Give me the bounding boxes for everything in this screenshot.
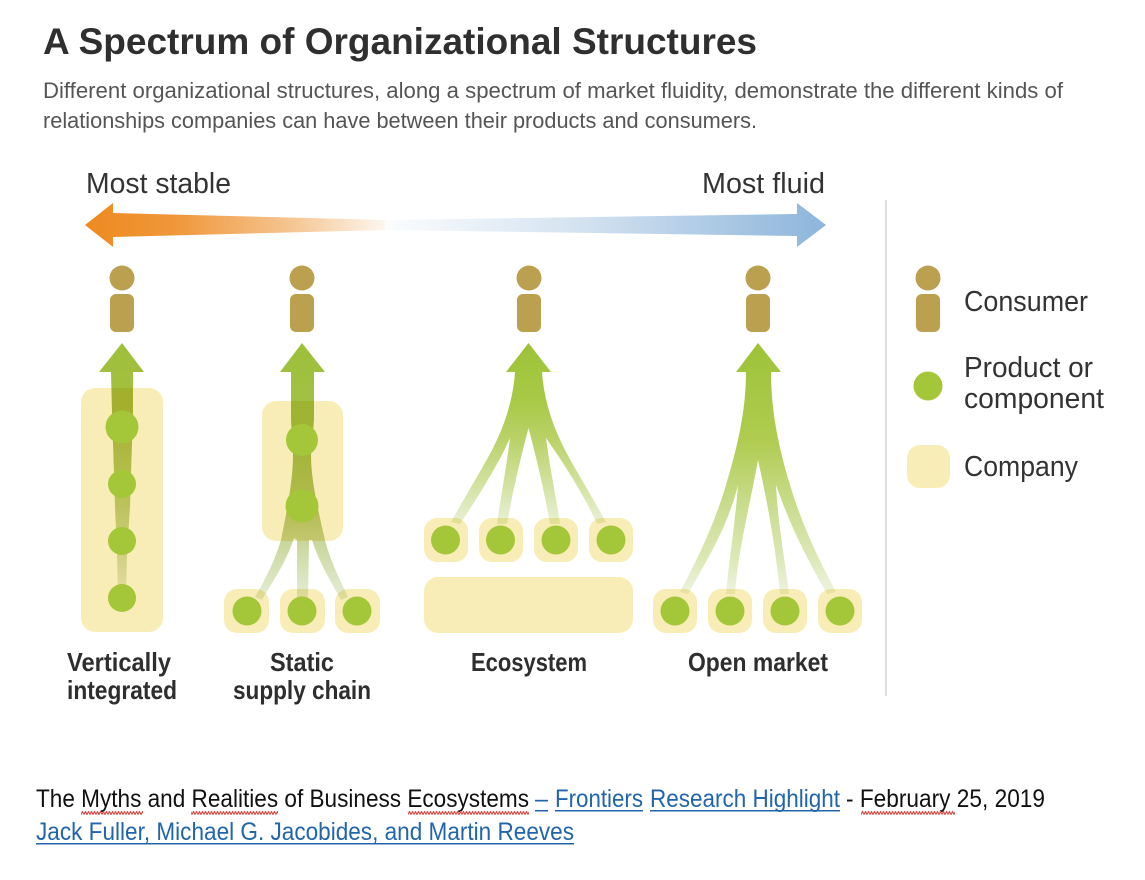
citation: Jack Fuller, Michael G. Jacobides, and Martin Reeves bbox=[36, 818, 574, 846]
citation: Research Highlight bbox=[650, 785, 840, 813]
product dots bbox=[106, 410, 138, 612]
column: static supply chain bbox=[224, 266, 380, 633]
column: open market bbox=[653, 266, 862, 633]
arrow: toward most stable bbox=[85, 203, 385, 247]
subtitle text bbox=[43, 78, 1064, 133]
arrow: toward most fluid bbox=[385, 203, 826, 247]
consumer icon bbox=[516, 266, 542, 332]
column labels: Vertically bbox=[67, 647, 171, 677]
subtitle text: relationships companies can have between their products and consumers. bbox=[43, 108, 757, 133]
partner boxes bbox=[424, 518, 633, 562]
flow arrow bbox=[255, 343, 348, 600]
legend: product or component bbox=[914, 352, 1104, 415]
column labels: Open market bbox=[688, 647, 828, 677]
column: ecosystem bbox=[424, 266, 633, 633]
product dots bbox=[431, 526, 626, 554]
legend bbox=[907, 266, 1104, 488]
flow arrow bbox=[99, 343, 144, 600]
citation: - February 25, 2019 bbox=[846, 785, 1045, 813]
citation bbox=[36, 785, 1045, 846]
subtitle text: Different organizational structures, along a spectrum of market fluidity, demonstrate the different kinds of bbox=[43, 78, 1064, 103]
supplier boxes bbox=[224, 589, 380, 633]
flow arrow bbox=[451, 343, 606, 524]
company block bbox=[262, 401, 343, 541]
company block bbox=[424, 577, 633, 633]
column labels bbox=[67, 647, 828, 705]
title: A Spectrum of Organizational Structures bbox=[43, 21, 757, 62]
column labels: Static bbox=[270, 647, 334, 677]
partner boxes bbox=[653, 589, 862, 633]
column labels: Ecosystem bbox=[471, 647, 587, 677]
citation: – bbox=[535, 785, 548, 813]
consumer icon bbox=[746, 266, 770, 332]
flow arrow bbox=[680, 343, 836, 594]
legend: company bbox=[907, 445, 1078, 488]
legend: consumer: Consumer bbox=[964, 286, 1088, 318]
product dots bbox=[232, 424, 372, 626]
legend: consumer bbox=[916, 266, 1088, 332]
column labels: supply chain bbox=[233, 675, 371, 705]
label: most stable: Most stable bbox=[86, 168, 231, 200]
product dots bbox=[660, 596, 854, 626]
company block bbox=[81, 388, 163, 632]
column labels: integrated bbox=[67, 675, 177, 705]
label: most fluid: Most fluid bbox=[702, 168, 825, 200]
column: vertically integrated bbox=[81, 266, 163, 632]
legend: company: Company bbox=[964, 451, 1078, 483]
citation: Frontiers bbox=[555, 785, 643, 813]
legend: product or component: component bbox=[964, 383, 1104, 415]
citation: The Myths and Realities of Business Ecosystems bbox=[36, 785, 529, 813]
consumer icon bbox=[290, 266, 314, 332]
legend: product or component: Product or bbox=[964, 352, 1093, 384]
consumer icon bbox=[110, 266, 134, 332]
